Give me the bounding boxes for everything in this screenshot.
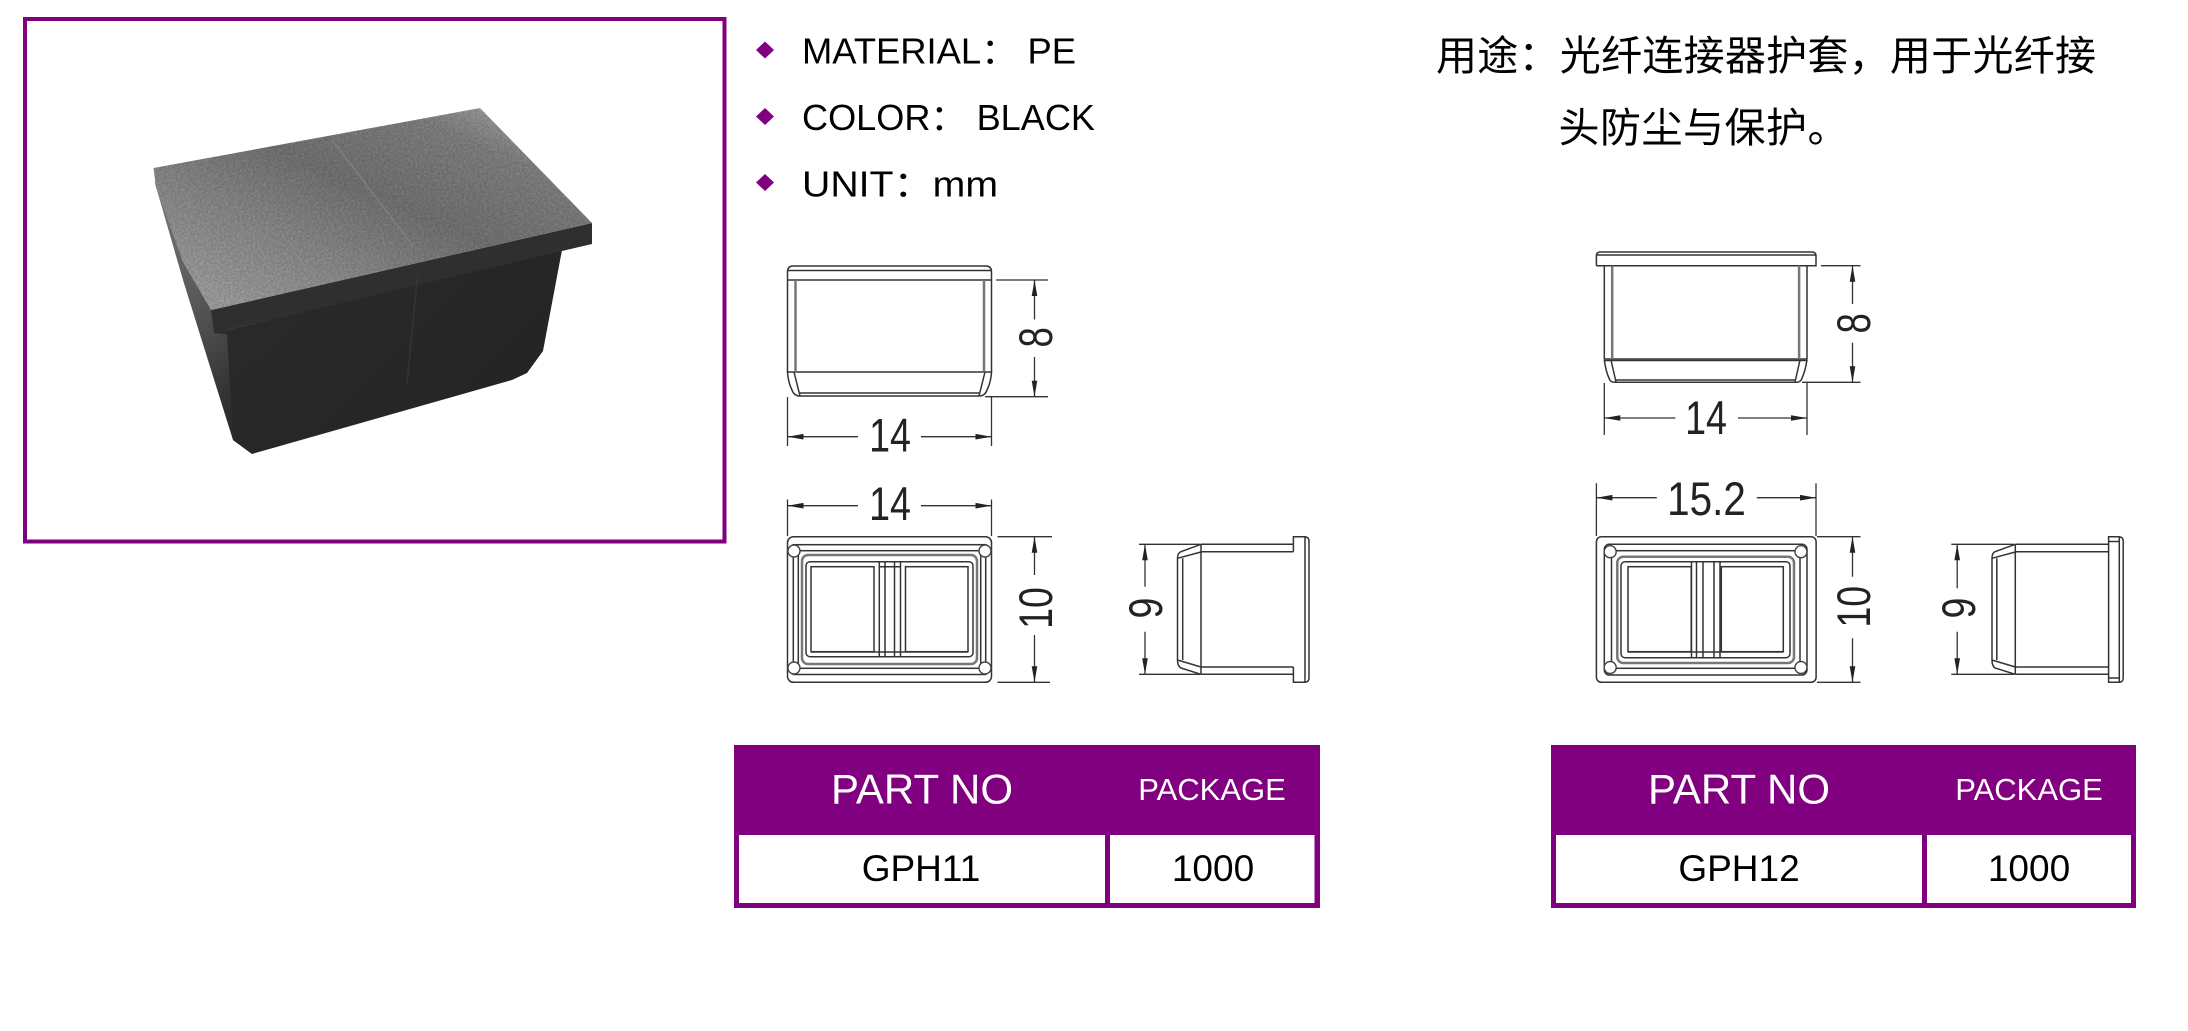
table header: package: PACKAGE <box>1138 772 1286 807</box>
dimension: height 9 <box>1120 544 1200 674</box>
text: usage description: 头防尘与保护。 <box>1558 105 1848 151</box>
dimension: height 9: 9 <box>1933 598 1986 618</box>
bullet: unit <box>756 174 774 191</box>
bullet: material <box>756 42 774 58</box>
dimension: height 10: 10 <box>1828 586 1881 628</box>
icon: black dust cap photo <box>154 108 592 454</box>
dimension: height 8 <box>985 280 1062 397</box>
dimension: width 14 <box>788 478 992 536</box>
text: material: MATERIAL： PE <box>802 30 1076 72</box>
table cell: part number: GPH11 <box>862 848 980 889</box>
text: usage description <box>1436 33 2096 151</box>
table cell: package quantity: 1000 <box>1988 848 2070 889</box>
table cell: package quantity: 1000 <box>1172 848 1254 889</box>
specification list <box>756 30 1095 204</box>
table header: package: PACKAGE <box>1955 772 2103 807</box>
dimension: width 14: 14 <box>1685 392 1727 445</box>
drawing: GPH11 side view <box>1120 537 1309 682</box>
table cell: part number: GPH12 <box>1678 848 1800 889</box>
drawing: GPH12 front view <box>1596 473 1881 682</box>
icon: corner pins <box>1604 546 1807 674</box>
bullet: color <box>756 108 774 125</box>
dimension: height 8 <box>1802 266 1880 382</box>
drawing: GPH12 top view <box>1596 252 1880 445</box>
dimension: height 10 <box>998 537 1063 682</box>
dimension: width 14: 14 <box>869 478 911 531</box>
drawing: GPH11 front view <box>788 478 1063 682</box>
panel: product photo frame <box>25 19 724 542</box>
dimension: width 15.2: 15.2 <box>1667 473 1746 526</box>
text: usage description: 用途：光纤连接器护套，用于光纤接 <box>1436 33 2096 79</box>
dimension: width 15.2 <box>1596 473 1816 536</box>
dimension: height 8: 8 <box>1010 327 1062 347</box>
dimension: height 9 <box>1933 544 2014 674</box>
icon: corner pins <box>788 545 991 674</box>
dimension: height 9: 9 <box>1120 598 1173 618</box>
dimension: width 14: 14 <box>869 410 911 463</box>
text: color: COLOR： BLACK <box>802 97 1095 138</box>
dimension: height 8: 8 <box>1828 313 1880 333</box>
table header: part no: PART NO <box>831 766 1013 812</box>
dimension: width 14 <box>788 397 992 463</box>
drawing: GPH12 side view <box>1933 537 2123 682</box>
table header: part no: PART NO <box>1648 766 1830 812</box>
dimension: width 14 <box>1604 383 1807 445</box>
dimension: height 10 <box>1817 537 1881 682</box>
text: unit: UNIT：mm <box>802 164 998 204</box>
dimension: height 10: 10 <box>1010 587 1063 629</box>
drawing: GPH11 top view <box>788 266 1062 463</box>
table: GPH12 <box>1551 745 2136 908</box>
table: GPH11 <box>734 745 1320 908</box>
